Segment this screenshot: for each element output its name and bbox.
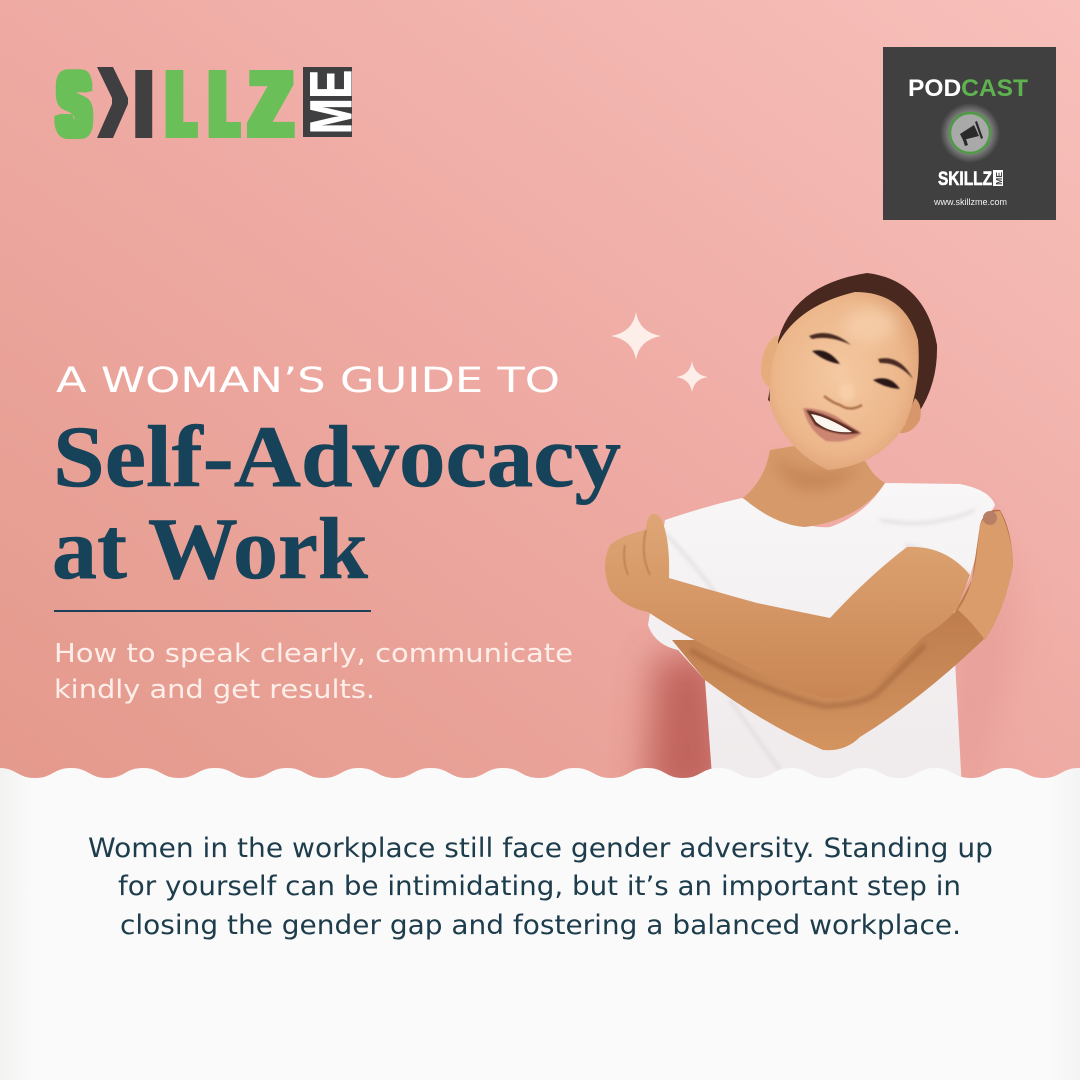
- neck shadow: [780, 464, 850, 492]
- upper arm shadow on lower arm: [690, 645, 925, 706]
- title: [52, 409, 621, 598]
- logo green letters: S: [59, 55, 89, 155]
- icon: small sparkle: [676, 361, 708, 392]
- logo green letters: Z: [251, 54, 291, 155]
- hand on shoulder: [958, 511, 1013, 640]
- right eyebrow: [878, 358, 913, 379]
- logo green letters: L: [212, 53, 236, 154]
- forehead highlight: [844, 307, 896, 343]
- podcast small logo: SKILLZ: [938, 169, 992, 190]
- lower arm: [672, 510, 1013, 750]
- intro paragraph: [88, 833, 993, 941]
- paragraph line three: closing the gender gap and fostering a balanced workplace.: [120, 910, 961, 941]
- back hair: [768, 273, 937, 415]
- right ear: [900, 398, 921, 433]
- shirt: [648, 483, 995, 790]
- woman illustration: [605, 273, 1013, 790]
- nose: [824, 396, 862, 408]
- wavy white section: [0, 768, 1080, 1080]
- pink hero background: [0, 0, 1080, 790]
- title line two: at Work: [52, 501, 368, 598]
- logo ME badge: ME: [299, 70, 364, 134]
- face: [770, 292, 919, 470]
- podcast url: www.skillzme.com: [933, 197, 1007, 207]
- logo green letters: L: [169, 53, 193, 154]
- logo: SkillzMe: [59, 53, 364, 155]
- kicker text: A WOMAN’S GUIDE TO: [56, 361, 560, 401]
- icon: large sparkle: [611, 312, 661, 360]
- title rule: [54, 610, 371, 612]
- podcast badge: [883, 47, 1056, 220]
- lips: [803, 408, 862, 442]
- subtitle: [54, 639, 573, 705]
- icon: megaphone: [940, 103, 1000, 163]
- background shadow behind woman: [645, 480, 1020, 800]
- left ear: [761, 335, 778, 388]
- neck: [743, 440, 885, 527]
- podcast heading: PODCAST: [908, 75, 1028, 102]
- logo dark letter I: I: [139, 54, 149, 155]
- teeth: [811, 414, 852, 432]
- logo chevron: [97, 67, 128, 138]
- upper arm with fist: [605, 514, 970, 698]
- left eye: [812, 350, 840, 364]
- shirt folds: [665, 510, 975, 770]
- title line one: Self-Advocacy: [53, 409, 621, 506]
- subtitle line one: How to speak clearly, communicate: [54, 639, 573, 669]
- thumb nail: [983, 511, 997, 525]
- paragraph line two: for yourself can be intimidating, but it’s an important step in: [118, 871, 961, 902]
- left eyebrow: [809, 333, 851, 345]
- logo green letters: [59, 53, 291, 155]
- nose highlight: [840, 384, 854, 400]
- paragraph line one: Women in the workplace still face gender adversity. Standing up: [88, 833, 993, 864]
- subtitle line two: kindly and get results.: [54, 675, 375, 705]
- mouth interior: [806, 410, 860, 434]
- podcast small logo: ME: [995, 171, 1004, 185]
- finger shadow: [624, 530, 650, 575]
- right eye: [873, 378, 900, 389]
